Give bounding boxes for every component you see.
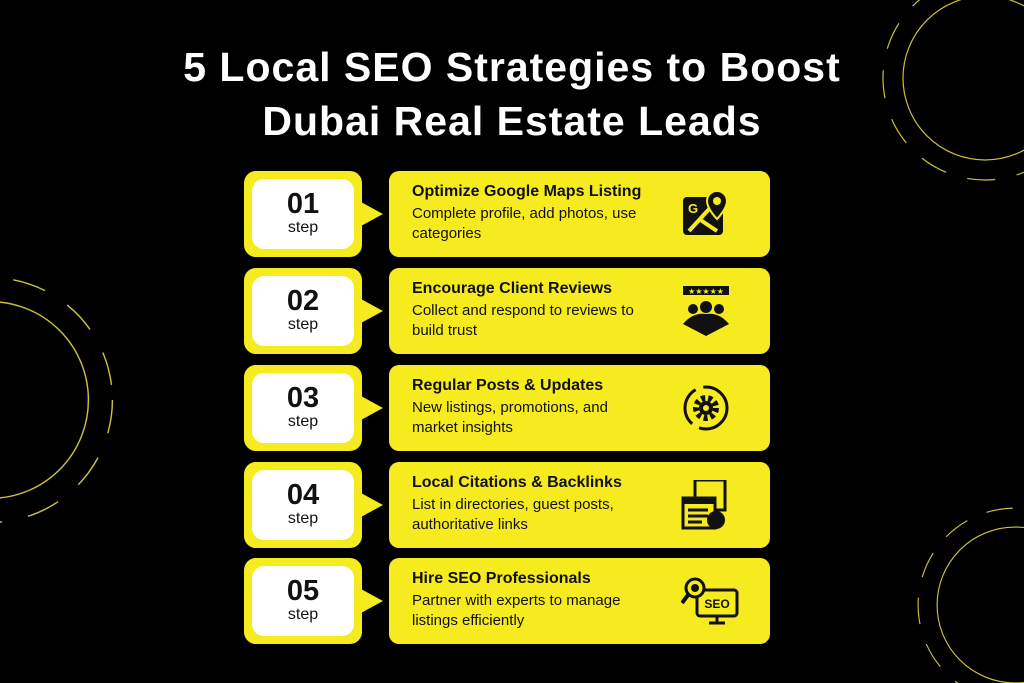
icon: google maps: G <box>688 201 698 216</box>
step 1: step <box>288 219 318 236</box>
icon: backlinks <box>682 480 726 530</box>
step 2: 02 <box>287 285 319 317</box>
step 1: 01 <box>287 188 319 220</box>
step 2: Collect and respond to reviews to build trust <box>412 302 634 339</box>
icon: reviews: ★★★★★ <box>688 287 724 296</box>
step 3 <box>244 365 770 451</box>
icon: reviews <box>683 286 729 336</box>
step 1: Optimize Google Maps Listing <box>412 183 641 200</box>
step 1: Complete profile, add photos, use categories <box>412 205 636 242</box>
step 3: Regular Posts & Updates <box>412 377 603 394</box>
step 4: 04 <box>287 479 319 511</box>
icon: gear refresh <box>684 386 728 430</box>
step 2: step <box>288 316 318 333</box>
icon: seo monitor <box>681 578 738 624</box>
title: 5 Local SEO Strategies to Boost <box>183 44 841 90</box>
step 2 <box>244 268 770 354</box>
icon: seo monitor: SEO <box>704 597 730 611</box>
step 3: 03 <box>287 382 319 414</box>
step 5: Partner with experts to manage listings efficiently <box>412 592 620 629</box>
step 1 <box>244 171 770 257</box>
step 3: step <box>288 413 318 430</box>
step 2: Encourage Client Reviews <box>412 280 612 297</box>
step 5: Hire SEO Professionals <box>412 570 591 587</box>
step 4 <box>244 462 770 548</box>
step 5: step <box>288 606 318 623</box>
icon: google maps <box>683 192 726 235</box>
title <box>183 44 841 144</box>
step 4: step <box>288 510 318 527</box>
step 4: Local Citations & Backlinks <box>412 474 622 491</box>
title: Dubai Real Estate Leads <box>262 98 762 144</box>
step 5: 05 <box>287 575 319 607</box>
step 4: List in directories, guest posts, authoritative links <box>412 496 614 533</box>
step 3: New listings, promotions, and market insights <box>412 399 608 436</box>
step 5 <box>244 558 770 644</box>
